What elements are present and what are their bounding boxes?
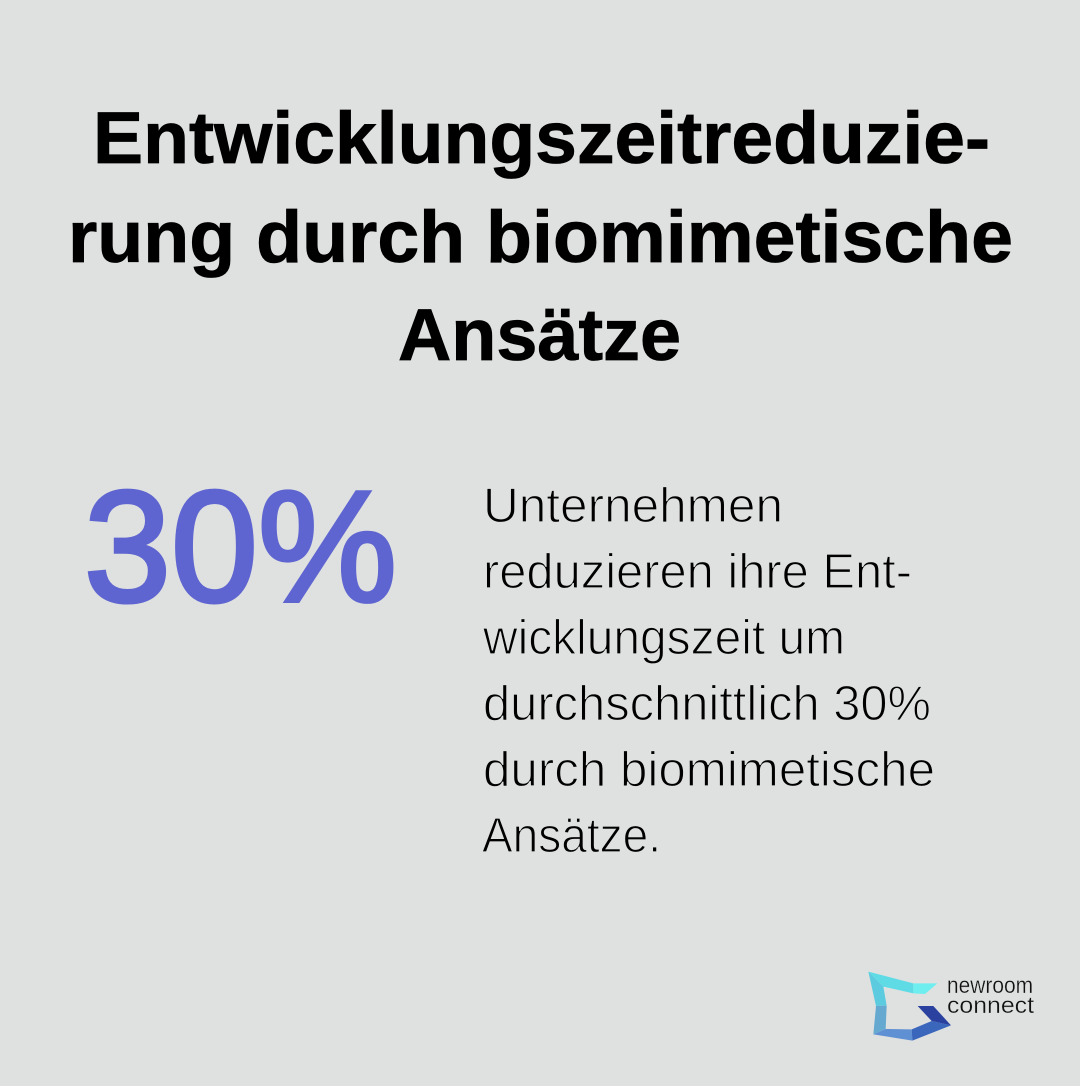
description text: durchschnittlich 30% <box>483 677 931 731</box>
description text: Ansätze. <box>482 809 661 863</box>
logo: newroom connect <box>868 972 1035 1041</box>
description text: Unternehmen <box>483 479 783 533</box>
title: Ansätze <box>398 295 681 376</box>
icon: logo mark <box>868 972 951 1041</box>
description text: durch biomimetische <box>483 743 935 797</box>
title: rung durch biomimetische <box>68 197 1013 278</box>
description text: reduzieren ihre Ent- <box>483 545 912 599</box>
description text <box>482 479 935 863</box>
logo wordmark <box>947 972 1035 1018</box>
title: Entwicklungszeitreduzie- <box>93 98 990 179</box>
title <box>68 98 1013 376</box>
big statistic: 30%: 30% <box>84 459 397 635</box>
logo wordmark: connect <box>947 992 1035 1018</box>
description text: wicklungszeit um <box>482 611 845 665</box>
logo wordmark: newroom <box>947 972 1033 998</box>
